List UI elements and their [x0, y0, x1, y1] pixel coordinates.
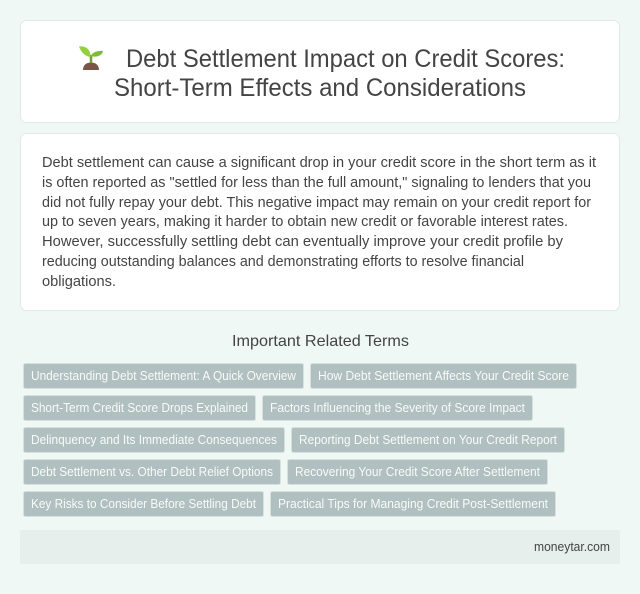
tag: Reporting Debt Settlement on Your Credit Report	[299, 433, 557, 447]
title: Short-Term Effects and Considerations	[114, 74, 526, 102]
title	[114, 45, 565, 102]
tag: Factors Influencing the Severity of Score Impact	[270, 401, 525, 415]
tag	[292, 428, 564, 452]
tag	[24, 364, 304, 388]
panel: summary text	[20, 134, 620, 310]
tag: Understanding Debt Settlement: A Quick Overview	[31, 369, 297, 383]
heading: important related terms: Important Related Terms	[232, 333, 409, 350]
title: Debt Settlement Impact on Credit Scores:	[126, 45, 565, 73]
tag: Short-Term Credit Score Drops Explained	[31, 401, 248, 415]
related term tags	[24, 364, 576, 516]
tag	[270, 492, 556, 516]
panel: title card	[20, 20, 620, 122]
summary paragraph: up to seven years, making it harder to obtain new credit or favorable interest rates.	[42, 214, 568, 230]
summary paragraph: is often reported as "settled for less than the full amount," signaling to lenders that you	[42, 175, 591, 191]
summary paragraph: did not fully repay your debt. This negative impact may remain on your credit report for	[42, 195, 591, 211]
summary paragraph: obligations.	[42, 274, 116, 290]
summary paragraph: Debt settlement can cause a significant drop in your credit score in the short term as it	[42, 155, 596, 171]
tag	[24, 428, 284, 452]
tag: Delinquency and Its Immediate Consequences	[31, 433, 277, 447]
tag	[310, 364, 576, 388]
tag	[288, 460, 548, 484]
tag: Debt Settlement vs. Other Debt Relief Options	[31, 465, 273, 479]
tag: Practical Tips for Managing Credit Post-Settlement	[278, 497, 549, 511]
tag	[262, 396, 532, 420]
tag	[24, 460, 280, 484]
footer	[20, 530, 620, 564]
tag: Recovering Your Credit Score After Settlement	[295, 465, 540, 479]
icon: seedling	[79, 46, 103, 70]
tag: How Debt Settlement Affects Your Credit Score	[318, 369, 569, 383]
tag	[24, 396, 256, 420]
summary paragraph: reducing outstanding balances and demonstrating efforts to resolve financial	[42, 254, 524, 270]
tag: Key Risks to Consider Before Settling Debt	[31, 497, 256, 511]
footer: moneytar.com	[534, 540, 610, 554]
summary paragraph: However, successfully settling debt can eventually improve your credit profile by	[42, 234, 564, 250]
summary paragraph	[42, 155, 596, 290]
tag	[24, 492, 264, 516]
